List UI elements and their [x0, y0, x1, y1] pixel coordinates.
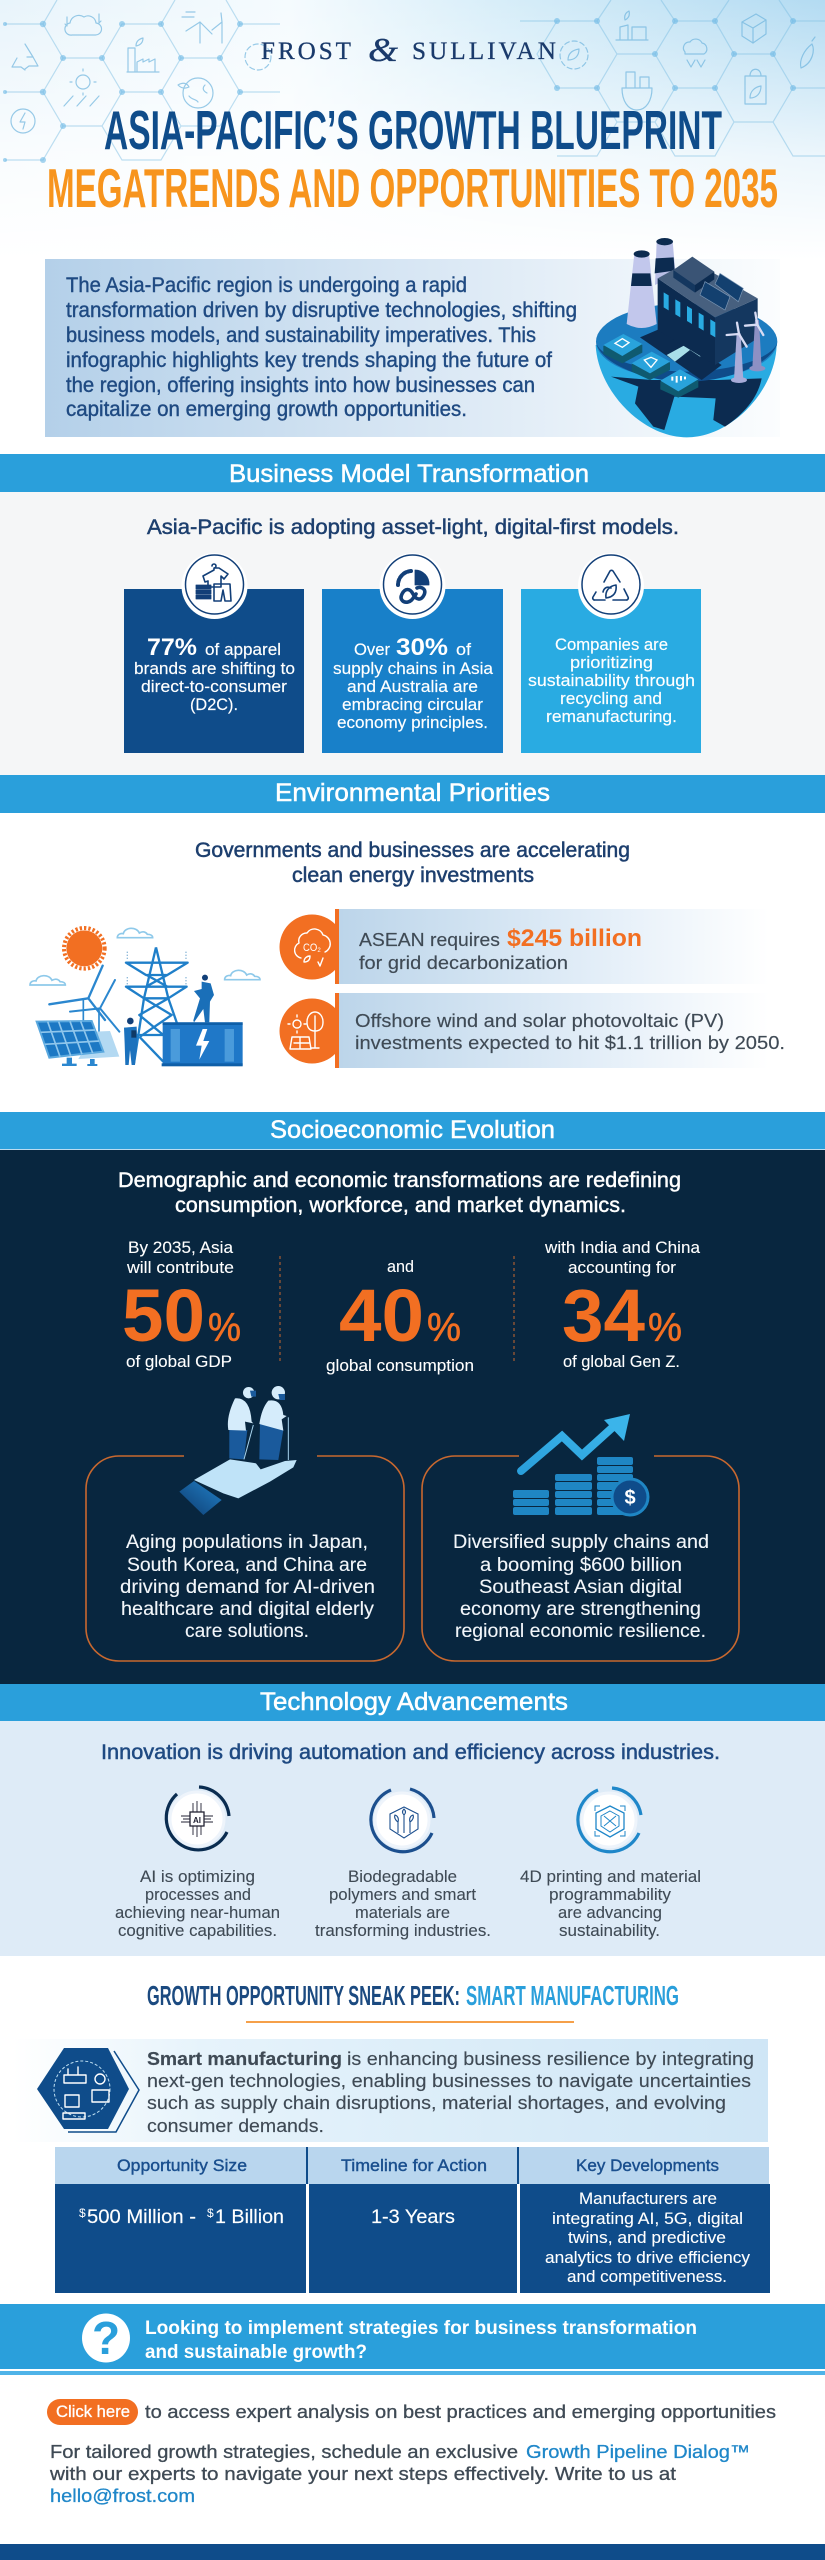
cell: timeline: 1-3 Years	[371, 2206, 455, 2228]
subheading: clean energy investments	[292, 864, 534, 887]
table: opportunity summary	[55, 2147, 770, 2293]
cell: opportunity size: $	[79, 2206, 86, 2220]
button: click here: Click here	[56, 2402, 130, 2421]
cell: key developments: twins, and predictive	[568, 2228, 726, 2247]
subheading	[118, 1169, 681, 1217]
item: AI: cognitive capabilities.	[118, 1921, 277, 1940]
panel: smart manufacturing description	[13, 2039, 768, 2142]
table header: Timeline for Action	[341, 2156, 487, 2175]
item: AI: achieving near-human	[115, 1903, 280, 1922]
panel: aging populations: driving demand for AI-driven	[120, 1577, 375, 1598]
heading: growth opportunity sneak peek: GROWTH OPPORTUNITY SNEAK PEEK:	[147, 1980, 460, 2011]
cell: key developments: and competitiveness.	[567, 2267, 727, 2286]
stat: 34% of global Gen Z: with India and China	[544, 1238, 701, 1257]
panel: intro text: capitalize on emerging growth opportunities.	[66, 398, 467, 421]
heading bar	[0, 454, 825, 492]
item: biodegradable polymers: transforming industries.	[315, 1921, 491, 1940]
item: 4D printing: 4D printing and material	[520, 1867, 701, 1886]
heading bar	[0, 1112, 825, 1150]
stat: 50% of global GDP	[122, 1238, 241, 1371]
item: 4D printing: programmability	[549, 1885, 671, 1904]
card: circular economy: supply chains in Asia	[333, 660, 494, 678]
icon: rising coins chart	[513, 1414, 648, 1515]
item: biodegradable polymers: Biodegradable	[348, 1867, 457, 1886]
heading bar	[0, 775, 825, 813]
section background	[0, 492, 825, 775]
button: click here	[47, 2399, 138, 2425]
icon: CO2 cloud: CO₂	[303, 942, 321, 954]
illustration: clean energy scene	[30, 928, 260, 1066]
callout: grid decarbonization: $245 billion	[507, 925, 642, 952]
card: recycling: recycling and	[560, 690, 662, 708]
panel: intro text: the region, offering insights into how businesses can	[66, 374, 535, 397]
cell: key developments: Manufacturers are	[579, 2189, 717, 2208]
card: circular economy: Over	[354, 641, 390, 659]
callout: offshore wind and solar: Offshore wind and solar photovoltaic (PV)	[355, 1010, 724, 1031]
panel: supply chains and digital economy: Southeast Asian digital	[479, 1577, 682, 1598]
cell: opportunity size: $	[207, 2206, 214, 2220]
hero line icons	[11, 11, 815, 133]
cell: opportunity size: 1 Billion	[215, 2206, 284, 2228]
section: socioeconomic evolution	[0, 1112, 825, 1684]
logo: Frost & Sullivan	[261, 32, 559, 69]
stat: 50% of global GDP: 50	[122, 1274, 205, 1357]
text block: click here	[47, 2399, 776, 2425]
panel: supply chains and digital economy	[422, 1414, 739, 1661]
subheading: consumption, workforce, and market dynamics.	[175, 1194, 626, 1217]
stat: 40% global consumption	[326, 1257, 474, 1375]
item: 4D printing: are advancing	[558, 1903, 662, 1922]
table header: Opportunity Size	[117, 2156, 247, 2175]
banner: call to action	[0, 2304, 825, 2375]
stat: 50% of global GDP: will contribute	[126, 1258, 234, 1277]
card: circular economy: and Australia are	[347, 678, 478, 696]
logo: Frost & Sullivan: FROST	[261, 38, 354, 65]
heading bar: Business Model Transformation	[229, 460, 589, 488]
panel: supply chains and digital economy: a booming $600 billion	[480, 1555, 682, 1576]
panel: smart manufacturing description: is enhancing business resilience by integrating	[347, 2048, 754, 2069]
heading bar	[0, 1684, 825, 1721]
stat: 40% global consumption: and	[387, 1257, 414, 1276]
stat: 34% of global Gen Z	[544, 1238, 701, 1371]
stat: 40% global consumption: global consumption	[326, 1356, 474, 1375]
card: D2C	[124, 553, 304, 753]
item: 4D printing	[520, 1788, 701, 1940]
card: recycling	[521, 553, 701, 753]
panel: aging populations: healthcare and digital elderly	[121, 1599, 375, 1620]
callout: grid decarbonization	[280, 909, 769, 984]
card: circular economy: embracing circular	[342, 696, 484, 714]
logo: Frost & Sullivan: SULLIVAN	[412, 38, 559, 65]
icon: smart factory hexagon	[37, 2048, 139, 2132]
card: D2C: (D2C).	[190, 696, 238, 714]
callout: offshore wind and solar	[280, 993, 785, 1068]
stat: 34% of global Gen Z: 34	[562, 1274, 645, 1357]
section: technology advancements	[0, 1684, 825, 1956]
panel: intro text	[45, 259, 780, 437]
card: recycling: sustainability through	[528, 672, 695, 690]
heading bar: Socioeconomic Evolution	[270, 1116, 555, 1144]
icon: elderly couple on hand	[179, 1386, 297, 1515]
panel: intro text: The Asia-Pacific region is undergoing a rapid	[66, 274, 467, 297]
stat: 40% global consumption: 40	[339, 1274, 424, 1357]
item: AI: processes and	[145, 1885, 251, 1904]
icon: recycle with leaf	[593, 570, 628, 600]
heading bar: Environmental Priorities	[275, 779, 550, 807]
panel: smart manufacturing description: Smart manufacturing	[147, 2048, 342, 2069]
subheading: Innovation is driving automation and efficiency across industries.	[101, 1741, 720, 1764]
icon: question mark: ?	[92, 2312, 120, 2364]
section: business model transformation	[0, 454, 825, 775]
icon: hexagon sprout	[371, 1789, 434, 1852]
stat: 34% of global Gen Z: %	[648, 1306, 682, 1350]
heading: growth opportunity sneak peek: SMART MANUFACTURING	[466, 1980, 679, 2011]
icon: question mark	[82, 2312, 130, 2364]
item: biodegradable polymers: materials are	[355, 1903, 450, 1922]
icon: CO2 cloud	[280, 914, 344, 980]
title	[47, 100, 778, 219]
stat: 50% of global GDP: of global GDP	[126, 1352, 232, 1371]
card: recycling: Companies are	[555, 636, 668, 654]
card: D2C: 77%	[147, 634, 197, 661]
panel: intro text: infographic highlights key trends shaping the future of	[66, 349, 552, 372]
panel: supply chains and digital economy: Diversified supply chains and	[453, 1532, 709, 1553]
icon: rising coins chart: $	[624, 1487, 636, 1509]
callout: offshore wind and solar: investments expected to hit $1.1 trillion by 2050.	[355, 1032, 785, 1053]
cell: timeline	[309, 2184, 517, 2293]
icon: AI chip: AI	[193, 1816, 201, 1825]
section background	[0, 1149, 825, 1684]
panel: smart manufacturing description: next-gen technologies, enabling businesses to navigate uncertainties	[147, 2070, 751, 2091]
text block: click here: to access expert analysis on best practices and emerging opportunities	[145, 2401, 776, 2422]
card: D2C: direct-to-consumer	[141, 678, 288, 696]
panel: intro text: transformation driven by disruptive technologies, shifting	[66, 299, 577, 322]
card: recycling: prioritizing	[570, 654, 653, 672]
item: 4D printing: sustainability.	[559, 1921, 660, 1940]
card: circular economy: of	[456, 641, 471, 659]
item: AI	[115, 1787, 280, 1940]
text block: growth pipeline dialog: For tailored growth strategies, schedule an exclusive	[50, 2441, 518, 2462]
stat: 34% of global Gen Z: accounting for	[568, 1258, 676, 1277]
callout: grid decarbonization: ASEAN requires	[359, 929, 500, 950]
hero background	[0, 0, 825, 260]
stat: 50% of global GDP: %	[208, 1306, 241, 1350]
stat: 40% global consumption: %	[427, 1306, 461, 1350]
icon: globe and infinity	[398, 570, 429, 602]
cell: opportunity size	[55, 2184, 306, 2293]
cell: key developments	[520, 2184, 770, 2293]
cell: opportunity size: 500 Million -	[87, 2206, 196, 2228]
panel: aging populations: South Korea, and China are	[127, 1555, 367, 1576]
item: biodegradable polymers	[315, 1789, 491, 1940]
footer bar	[0, 2544, 825, 2560]
panel: smart manufacturing description: such as supply chain disruptions, material shortages, and evolving	[147, 2092, 726, 2113]
panel: supply chains and digital economy: economy are strengthening	[460, 1599, 701, 1620]
table header	[55, 2147, 769, 2184]
text block: growth pipeline dialog	[49, 2441, 750, 2506]
illustration: factory on globe	[596, 238, 777, 437]
card: D2C: of apparel	[205, 641, 281, 659]
icon: 4D hexagon	[578, 1788, 641, 1852]
stat: 50% of global GDP: By 2035, Asia	[128, 1238, 234, 1257]
cell: key developments: analytics to drive efficiency	[545, 2248, 750, 2267]
card: D2C: brands are shifting to	[134, 660, 295, 678]
subheading: Demographic and economic transformations are redefining	[118, 1169, 681, 1192]
card: circular economy: 30%	[396, 634, 448, 661]
section: environmental priorities	[0, 775, 825, 1068]
panel: supply chains and digital economy: regional economic resilience.	[455, 1621, 706, 1642]
heading bar: Technology Advancements	[260, 1688, 568, 1716]
table header: Key Developments	[576, 2156, 719, 2175]
text block: growth pipeline dialog: hello@frost.com	[50, 2485, 195, 2506]
banner: call to action: and sustainable growth?	[145, 2342, 367, 2363]
item: AI: AI is optimizing	[140, 1867, 255, 1886]
callout: grid decarbonization: for grid decarbonization	[359, 952, 568, 973]
panel: aging populations: care solutions.	[185, 1621, 309, 1642]
icon: apparel	[196, 564, 231, 601]
stat: 34% of global Gen Z: of global Gen Z.	[563, 1352, 680, 1371]
icon: solar and turbine	[280, 998, 344, 1064]
card: circular economy: economy principles.	[337, 714, 488, 732]
banner: call to action: Looking to implement strategies for business transformation	[145, 2318, 697, 2339]
section background	[0, 1721, 825, 1956]
cell: key developments: integrating AI, 5G, digital	[552, 2209, 743, 2228]
subheading: Governments and businesses are accelerating	[195, 839, 630, 862]
text block: growth pipeline dialog: with our experts to navigate your next steps effectively. Write to us at	[49, 2463, 676, 2484]
hexagon lattice pattern	[3, 0, 825, 163]
panel: smart manufacturing description: consumer demands.	[147, 2115, 324, 2136]
panel: aging populations: Aging populations in Japan,	[126, 1532, 368, 1553]
subheading	[195, 839, 630, 887]
panel: aging populations	[86, 1386, 404, 1661]
subheading: Asia-Pacific is adopting asset-light, digital-first models.	[147, 516, 679, 539]
panel: intro text: business models, and sustainability imperatives. This	[66, 324, 536, 347]
logo: Frost & Sullivan: &	[368, 32, 399, 69]
card: circular economy	[322, 553, 503, 753]
card: recycling: remanufacturing.	[546, 708, 677, 726]
text block: growth pipeline dialog: Growth Pipeline Dialog™	[526, 2441, 750, 2462]
item: biodegradable polymers: polymers and smart	[329, 1885, 476, 1904]
icon: AI chip	[166, 1787, 229, 1850]
